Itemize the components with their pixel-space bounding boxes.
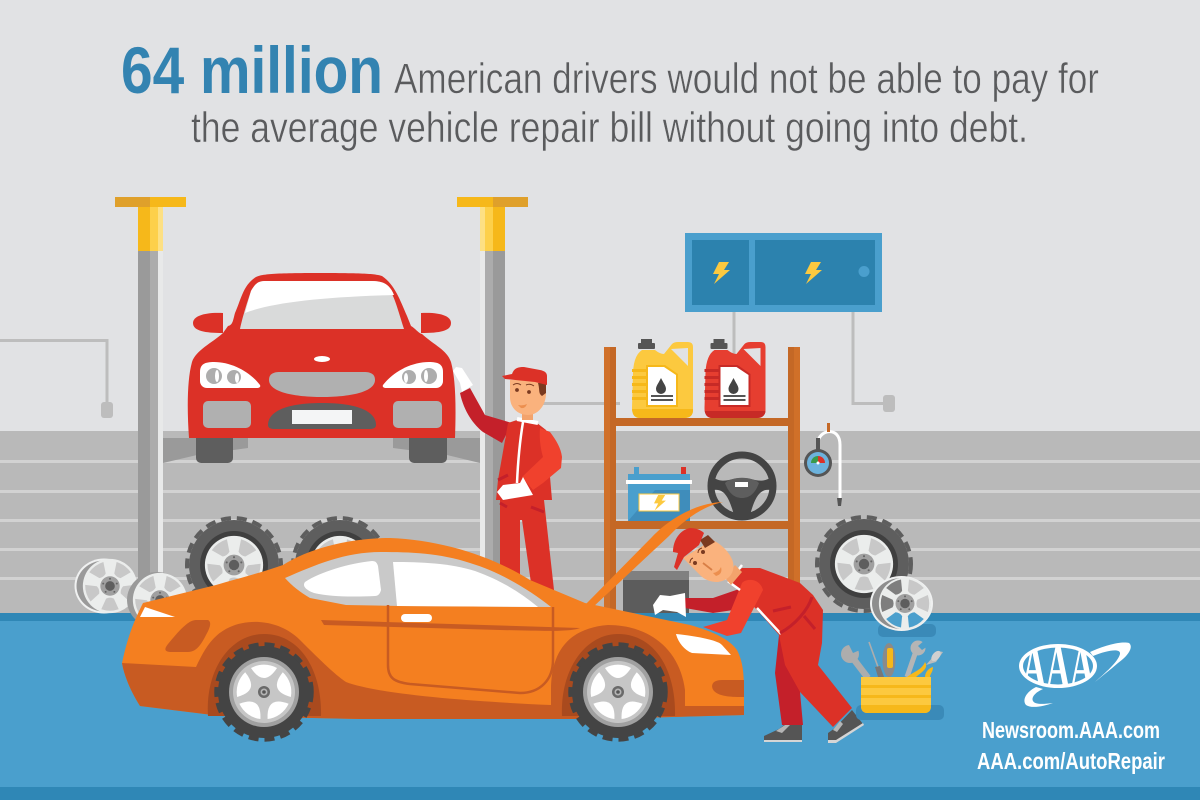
engine block [623,571,689,613]
garage door band [0,431,1200,614]
mechanic bending over [653,528,864,743]
air intake [712,680,744,697]
AAA logo [1019,642,1131,707]
loose rim right [870,576,933,631]
door seam [388,605,553,693]
glove lower [497,477,533,500]
raised arm [460,388,512,443]
head [673,528,742,585]
car body [122,538,744,719]
window frame [285,552,551,607]
front wheel [570,644,666,740]
steering wheel [711,455,773,517]
rim shadow [878,624,936,637]
tyre pressure gauge [804,423,842,506]
lift arms [163,438,480,463]
car battery [626,467,692,521]
back tyre left [187,518,281,612]
mechanic standing [453,367,562,590]
large tyre right [817,517,911,611]
lift post right [457,197,528,591]
floor [0,613,1200,800]
head [502,367,547,420]
footer links [977,717,1165,774]
headlight [676,634,731,655]
legs [500,500,554,590]
back tyre middle [293,518,387,612]
wall pipes [0,312,895,418]
electrical panel [685,233,882,312]
rear lamp recess [165,620,210,652]
tools [841,640,943,678]
lift post left [115,197,186,591]
loose rim 1 [74,551,146,622]
tail light [140,607,175,617]
AAA logo: AAA [1022,633,1094,701]
rear window [304,561,381,597]
door handle [401,614,432,622]
suit lines [729,565,781,634]
arm far [685,588,747,613]
orange car [122,502,744,740]
side stripe [321,620,580,631]
title: 64 million [121,33,383,107]
red car on lift [188,273,456,463]
oil jug red [704,339,766,418]
rear wheel [216,644,312,740]
oil jug yellow [632,339,693,418]
front window [393,562,538,607]
shoes [764,710,864,743]
loose rim 2 [124,565,196,636]
tool box [861,677,931,713]
rear leg [775,635,818,725]
title [121,33,1099,152]
title: the average vehicle repair bill without going into debt. [191,104,1028,152]
lower body shading [122,622,744,719]
open hood [585,502,723,608]
glove [653,593,686,617]
tool box shadow [856,705,944,720]
torso [496,420,552,500]
torso and front leg [728,568,852,727]
shelving unit [604,347,800,612]
glove top [453,367,473,392]
